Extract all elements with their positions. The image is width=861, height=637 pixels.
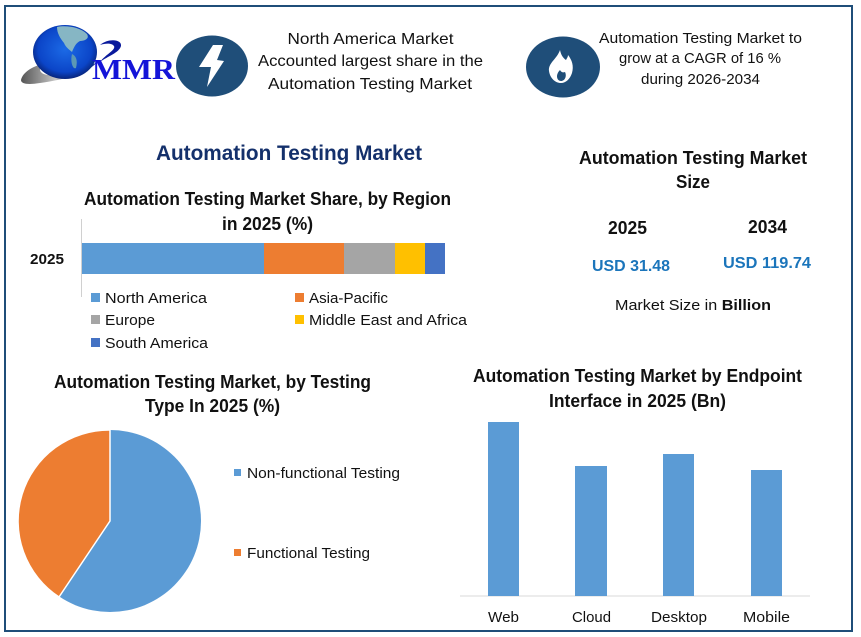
main title: Automation Testing Market — [156, 142, 422, 165]
legend: regions: Europe — [105, 312, 155, 329]
legend: testing type: Non-functional Testing — [247, 465, 400, 482]
bar chart: endpoint interface: Web — [488, 609, 519, 626]
heading: testing type: Type In 2025 (%) — [145, 396, 280, 416]
legend: regions: South America — [105, 335, 209, 352]
icon: lightning bolt — [176, 36, 248, 96]
callout: North America: Accounted largest share in the — [258, 53, 483, 70]
stacked bar chart: 2025 — [30, 251, 64, 268]
callout: North America — [258, 31, 483, 93]
heading: share by region: Automation Testing Market Share, by Region — [84, 189, 451, 209]
logo: MMR globe: MMR — [92, 54, 176, 86]
legend: regions: Asia-Pacific — [309, 290, 388, 307]
callout: North America: North America Market — [288, 31, 454, 48]
callout: CAGR — [599, 30, 802, 88]
logo: MMR globe — [21, 25, 176, 86]
legend: regions: North America — [105, 290, 208, 307]
legend: testing type — [234, 465, 400, 562]
bar chart: endpoint interface: Desktop — [651, 609, 707, 626]
market size values: USD 31.48 — [592, 258, 670, 275]
heading: share by region: in 2025 (%) — [222, 214, 313, 234]
heading: endpoint interface: Automation Testing Market by Endpoint — [473, 366, 802, 386]
callout: CAGR: Automation Testing Market to — [599, 30, 802, 47]
icon: flame — [526, 36, 600, 98]
bar chart: endpoint interface: Mobile — [743, 609, 790, 626]
heading: endpoint interface: Interface in 2025 (Bn) — [549, 391, 726, 411]
market size values: Market Size in Billion — [615, 297, 771, 314]
heading: share by region — [84, 189, 451, 234]
market size values: 2034 — [748, 217, 787, 237]
callout: CAGR: grow at a CAGR of 16 % — [619, 50, 781, 67]
callout: North America: Automation Testing Market — [268, 76, 473, 93]
heading: market size — [579, 148, 807, 192]
heading: endpoint interface — [473, 366, 802, 411]
market size values: USD 119.74 — [723, 255, 811, 272]
legend: regions: Middle East and Africa — [309, 312, 468, 329]
legend: testing type: Functional Testing — [247, 545, 370, 562]
bar chart: endpoint interface: Cloud — [572, 609, 611, 626]
market size values: 2025 — [608, 218, 647, 238]
stacked bar chart — [30, 219, 445, 297]
heading: market size: Automation Testing Market — [579, 148, 807, 168]
heading: testing type: Automation Testing Market, by Testing — [54, 372, 371, 392]
heading: testing type — [54, 372, 371, 416]
market size values — [592, 217, 811, 314]
heading: market size: Size — [676, 172, 710, 192]
bar chart: endpoint interface — [460, 422, 810, 626]
legend: regions — [91, 290, 468, 352]
pie chart — [18, 430, 201, 612]
callout: CAGR: during 2026-2034 — [641, 71, 760, 88]
